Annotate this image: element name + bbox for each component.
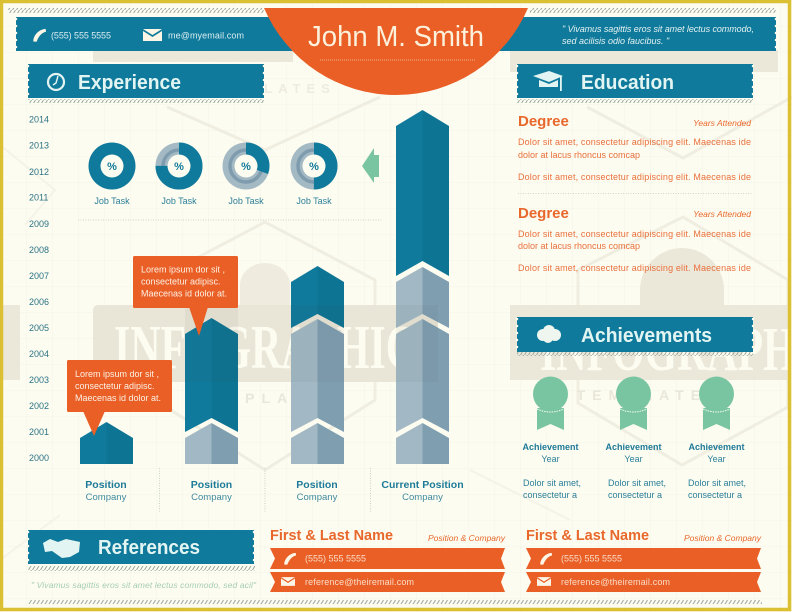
education entry 1: dolor at lacus rhoncus comcap <box>518 150 640 160</box>
heading: education: Education <box>581 72 674 94</box>
reference 1: Position & Company <box>428 533 506 543</box>
donut 4: Job Task <box>296 196 332 206</box>
heading: references: References <box>98 537 200 559</box>
icon: phone <box>284 553 296 565</box>
watermark: TEMPLATES <box>195 390 341 406</box>
watermark overlay on bars <box>185 305 438 382</box>
achievement 2: Year <box>624 454 643 464</box>
donut 2: Job Task <box>161 196 197 206</box>
donut 4: % <box>309 161 319 173</box>
achievement 3: Year <box>707 454 726 464</box>
achievement 1: Dolor sit amet, <box>523 478 581 488</box>
callout 1 <box>67 360 172 436</box>
position 3: Position <box>296 479 338 491</box>
name: John M. Smith <box>308 21 484 53</box>
icon: mail <box>143 29 162 41</box>
header quote: " Vivamus sagittis eros sit amet lectus commodo, <box>562 24 754 34</box>
current position: Current Position <box>381 479 464 491</box>
chart year axis: 2005 <box>29 323 49 333</box>
position 1: Position <box>85 479 127 491</box>
reference 1 <box>270 527 506 592</box>
icon: graduation cap <box>533 71 563 91</box>
callout 1: Maecenas id dolor at. <box>75 393 161 403</box>
education entry 2: Dolor sit amet, consectetur adipiscing elit. Maecenas ide <box>518 229 751 239</box>
icon: handshake <box>43 539 80 558</box>
callout 1: Lorem ipsum dor sit , <box>75 369 159 379</box>
watermark: INFOGRAPHIC <box>114 314 416 382</box>
position 3: Company <box>297 492 338 503</box>
reference 1: First & Last Name <box>270 527 393 544</box>
achievement 1: consectetur a <box>523 490 577 500</box>
callout 2: Lorem ipsum dor sit , <box>141 264 225 274</box>
achievement 3: consectetur a <box>688 490 742 500</box>
reference 2: reference@theiremail.com <box>561 577 670 587</box>
donut 1: % <box>107 161 117 173</box>
current position <box>381 479 464 503</box>
heading: experience <box>28 64 264 98</box>
callout 2 <box>133 256 238 336</box>
education entry 1 <box>518 113 751 182</box>
chart year axis: 2003 <box>29 375 49 385</box>
bar 1 <box>80 422 133 464</box>
contact phone: (555) 555 5555 <box>51 30 111 40</box>
education entry 2 <box>518 205 751 273</box>
bar 4 <box>396 110 449 464</box>
heading: experience: Experience <box>78 72 181 94</box>
header ribbon <box>16 17 776 51</box>
reference 2: Position & Company <box>684 533 762 543</box>
heading: references <box>28 530 254 564</box>
education entry 1: Years Attended <box>693 118 751 128</box>
donut 1 <box>88 142 136 206</box>
donut 2: % <box>174 161 184 173</box>
achievement 1: Year <box>541 454 560 464</box>
achievement 3: Achievement <box>688 442 745 452</box>
donut 1: Job Task <box>94 196 130 206</box>
position labels <box>85 479 464 503</box>
job task donuts <box>88 142 338 206</box>
chart year axis: 2014 <box>29 114 49 124</box>
icon: mail <box>281 577 295 586</box>
achievement 2: Dolor sit amet, <box>608 478 666 488</box>
arrow: points left <box>362 148 379 183</box>
callout 1: consectetur adipisc. <box>75 381 155 391</box>
current position: Company <box>402 492 443 503</box>
achievement 3 <box>688 376 746 500</box>
bar 3 <box>291 266 344 464</box>
heading: achievements: Achievements <box>581 325 712 347</box>
position 2 <box>191 479 232 503</box>
reference 2 <box>526 527 762 592</box>
references quote: " Vivamus sagittis eros sit amet lectus commodo, sed acil" <box>31 580 257 590</box>
icon: phone <box>33 29 46 42</box>
header quote: sed acilisis odio faucibus. " <box>562 36 670 46</box>
chart year axis: 2000 <box>29 453 49 463</box>
position 3 <box>296 479 338 503</box>
position 2: Company <box>191 492 232 503</box>
achievement 2 <box>605 376 666 500</box>
education entry 2: Degree <box>518 205 569 222</box>
education entry 1: Dolor sit amet, consectetur adipiscing elit. Maecenas ide <box>518 137 751 147</box>
chart year axis: 2007 <box>29 271 49 281</box>
contact email: me@myemail.com <box>168 30 244 40</box>
position 1: Company <box>86 492 127 503</box>
chart year axis: 2004 <box>29 349 49 359</box>
chart year axis: 2001 <box>29 427 49 437</box>
position 1 <box>85 479 127 503</box>
chart year axis <box>29 114 49 463</box>
donut 2 <box>156 142 202 206</box>
chart year axis: 2011 <box>29 192 48 202</box>
chart year axis: 2012 <box>29 167 49 177</box>
reference 1: (555) 555 5555 <box>305 554 366 564</box>
achievement 3: Dolor sit amet, <box>688 478 746 488</box>
reference 2: First & Last Name <box>526 527 649 544</box>
donut 4 <box>290 142 338 206</box>
icon: clock <box>48 74 64 90</box>
watermark: LATES <box>264 81 336 96</box>
icon: mail <box>537 577 551 586</box>
icon: phone <box>540 553 552 565</box>
education entry 1: Dolor sit amet, consectetur adipiscing elit. Maecenas ide <box>518 172 751 182</box>
chart year axis: 2002 <box>29 401 49 411</box>
education entry 2: Years Attended <box>693 209 751 219</box>
reference 2: (555) 555 5555 <box>561 554 622 564</box>
achievement 2: consectetur a <box>608 490 662 500</box>
icon: brain <box>537 325 561 343</box>
callout 2: Maecenas id dolor at. <box>141 288 227 298</box>
education entry 2: Dolor sit amet, consectetur adipiscing elit. Maecenas ide <box>518 263 751 273</box>
chart year axis: 2006 <box>29 297 49 307</box>
heading: education <box>517 64 753 98</box>
donut 3: % <box>241 161 251 173</box>
achievement 1 <box>522 376 581 500</box>
bar 2 <box>185 318 238 464</box>
donut 3: Job Task <box>228 196 264 206</box>
donut 3 <box>222 142 270 206</box>
education entry 1: Degree <box>518 113 569 130</box>
name badge <box>264 8 528 95</box>
callout 2: consectetur adipisc. <box>141 276 221 286</box>
chart year axis: 2009 <box>29 219 49 229</box>
heading: achievements <box>517 317 753 352</box>
education entry 2: dolor at lacus rhoncus comcap <box>518 241 640 251</box>
chart year axis: 2008 <box>29 245 49 255</box>
watermark: TEMPLATES <box>577 387 723 403</box>
position 2: Position <box>191 479 232 491</box>
achievement 1: Achievement <box>522 442 579 452</box>
achievement 2: Achievement <box>605 442 662 452</box>
chart year axis: 2013 <box>29 140 49 150</box>
reference 1: reference@theiremail.com <box>305 577 414 587</box>
bar chart <box>80 110 449 464</box>
